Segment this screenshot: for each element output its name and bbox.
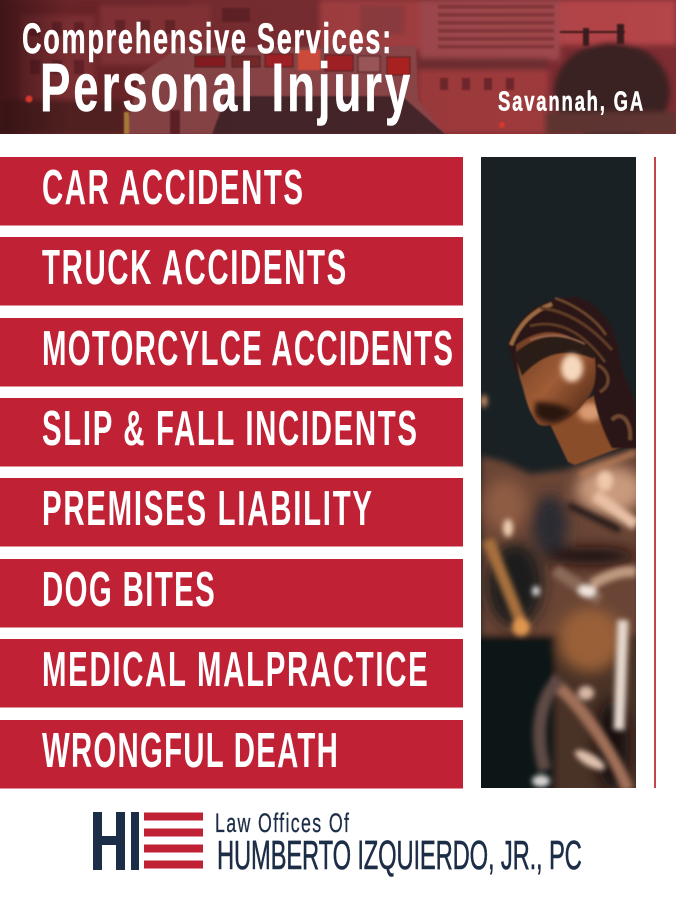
building windows <box>30 8 514 90</box>
heading line: Personal Injury: Personal Injury <box>40 50 411 126</box>
service bar: truck accidents: TRUCK ACCIDENTS <box>42 239 346 295</box>
service bar: medical malpractice <box>0 639 463 708</box>
face <box>514 332 596 426</box>
logo mark: HI with stripes <box>93 812 203 870</box>
service bar: dog bites: DOG BITES <box>42 561 215 617</box>
lady justice statue photo <box>476 157 644 795</box>
service bar: motorcycle accidents: MOTORCYLCE ACCIDENTS <box>42 320 453 376</box>
torso and lower drapery, blurred <box>476 446 640 795</box>
left edge shading <box>0 0 346 134</box>
service bar: dog bites <box>0 559 463 628</box>
service bar: slip and fall <box>0 398 463 466</box>
header banner: ambulance city photo with red tint <box>0 0 676 142</box>
ambulance <box>124 46 445 134</box>
location: Savannah, GA: Savannah, GA <box>498 87 643 118</box>
service bar: wrongful death <box>0 720 463 788</box>
service list <box>0 157 463 788</box>
traffic lights <box>560 24 625 46</box>
service bar: premises liability <box>0 478 463 546</box>
logo text: firm name: HUMBERTO IZQUIERDO, JR., PC <box>217 834 582 879</box>
service bar: medical malpractice: MEDICAL MALPRACTICE <box>42 641 428 697</box>
service bar: truck accidents <box>0 237 463 306</box>
neck <box>548 395 622 465</box>
service bar: car accidents: CAR ACCIDENTS <box>42 159 303 215</box>
header title text <box>22 14 643 126</box>
service bar: car accidents <box>0 157 463 226</box>
tower windows <box>438 5 554 48</box>
vertical red rule <box>654 157 656 788</box>
service bar: slip and fall: SLIP & FALL INCIDENTS <box>42 400 417 456</box>
service bar: wrongful death: WRONGFUL DEATH <box>42 722 338 778</box>
small red lights <box>26 96 32 102</box>
logo text: Law Offices Of: Law Offices Of <box>215 807 349 838</box>
logo <box>93 807 582 879</box>
hair <box>508 297 638 448</box>
service bar: premises liability: PREMISES LIABILITY <box>42 480 372 536</box>
heading line: Comprehensive Services: Comprehensive Services: <box>22 14 391 63</box>
